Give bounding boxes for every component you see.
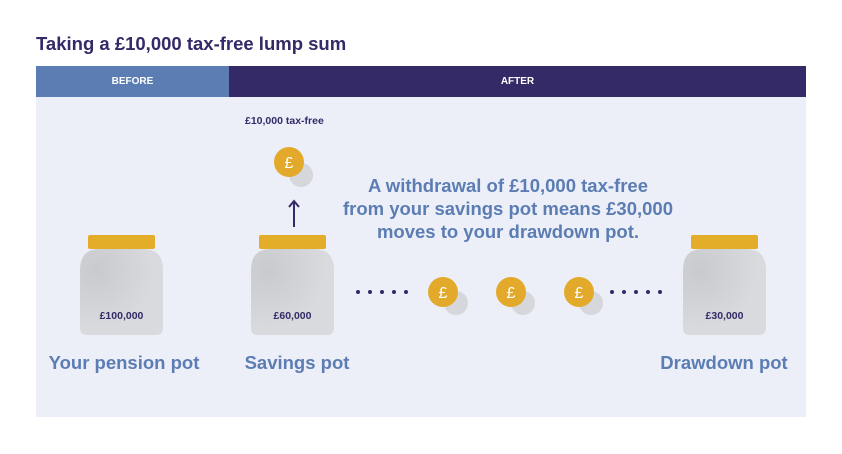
panel body (36, 97, 806, 417)
jar labels: Drawdown pot (660, 352, 788, 373)
arrow up (289, 201, 299, 227)
coin: withdrawn (274, 147, 313, 187)
jar labels (49, 352, 788, 373)
jar: drawdown (683, 235, 766, 335)
jar: pension: £100,000 (100, 310, 144, 322)
coins moving (428, 277, 603, 315)
explanation text: A withdrawal of £10,000 tax-free (368, 175, 648, 196)
label: tax-free: £10,000 tax-free (245, 115, 324, 127)
jar: pension (80, 235, 163, 335)
explanation text: moves to your drawdown pot. (377, 221, 639, 242)
explanation text (343, 175, 673, 242)
coins moving: £ (575, 285, 584, 302)
header: before (36, 66, 229, 97)
dots right (610, 290, 662, 294)
explanation text: from your savings pot means £30,000 (343, 198, 673, 219)
jar: drawdown: £30,000 (706, 310, 744, 322)
coin: withdrawn: £ (285, 155, 294, 172)
header: before: BEFORE (112, 76, 153, 87)
coins moving: £ (507, 285, 516, 302)
jar: savings: £60,000 (274, 310, 312, 322)
dots left (356, 290, 408, 294)
jar labels: Savings pot (245, 352, 349, 373)
header: after (229, 66, 806, 97)
jar labels: Your pension pot (49, 352, 199, 373)
coins moving: £ (439, 285, 448, 302)
jar: savings (251, 235, 334, 335)
header: after: AFTER (501, 76, 534, 87)
title: Taking a £10,000 tax-free lump sum (36, 33, 346, 54)
